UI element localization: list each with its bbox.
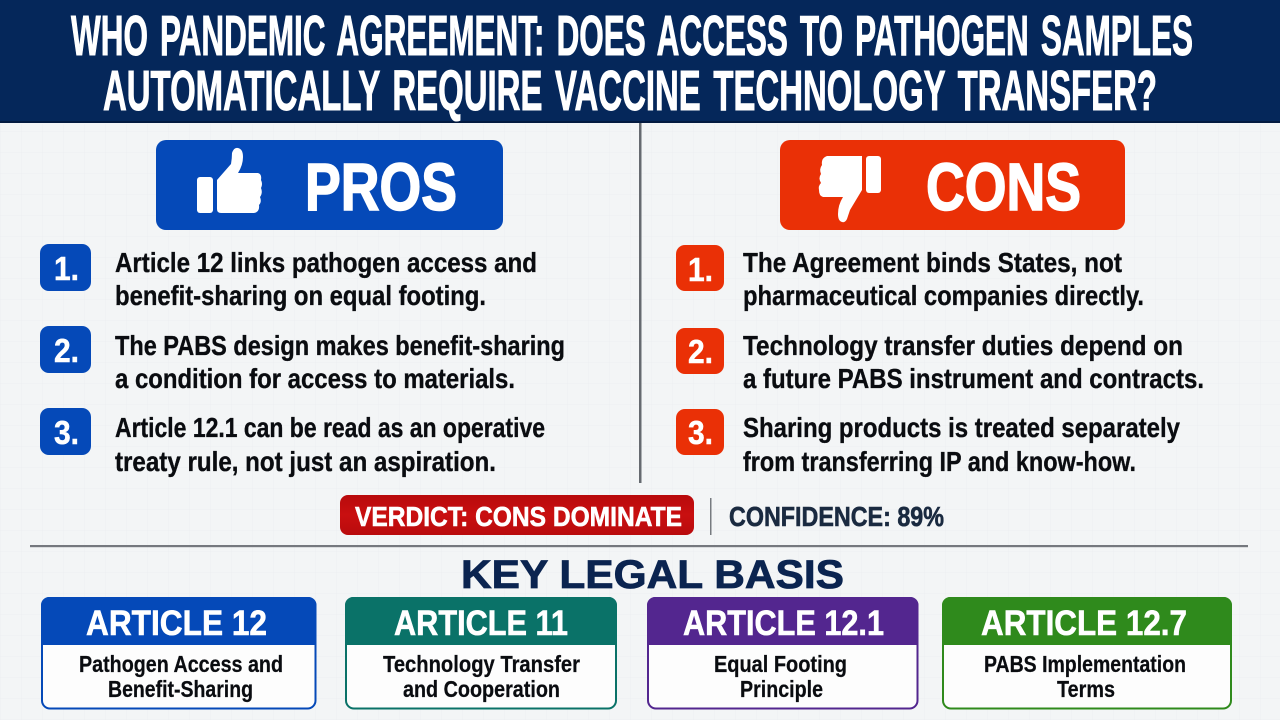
panel: cons [676,140,1204,477]
card: article 11 [345,597,617,708]
pros item 2: The PABS design makes benefit-sharing [115,330,565,361]
card: article 12.7 [942,597,1232,708]
card: article 12.1 [647,597,918,708]
cons item 1 [676,245,1144,311]
card: article 12.1: Principle [740,676,823,702]
section heading: key legal basis: KEY LEGAL BASIS [461,553,844,597]
pros heading badge [156,140,503,230]
cons item 1: pharmaceutical companies directly. [743,280,1144,311]
card: article 12.7: ARTICLE 12.7 [981,604,1187,643]
pros item 1: benefit-sharing on equal footing. [115,280,486,311]
card: article 12.7: PABS Implementation [984,651,1186,677]
cons item 1: 1. [688,251,713,288]
card: article 12.1: ARTICLE 12.1 [683,604,884,643]
card: article 11: Technology Transfer [383,651,580,677]
cons item 2 [676,328,1204,394]
pros item 3: treaty rule, not just an aspiration. [115,446,496,477]
cons item 2: 2. [688,333,713,370]
card: article 11: and Cooperation [403,676,560,702]
cons heading badge [780,140,1125,230]
pros item 2 [40,326,565,394]
pros item 2: 2. [54,332,79,369]
pros item 1 [40,244,537,311]
verdict bar [340,495,944,535]
header banner with title [0,0,1280,123]
confidence score: CONFIDENCE: 89% [729,501,944,532]
verdict pill [340,495,694,535]
pros item 2: a condition for access to materials. [115,363,515,394]
panel: pros [40,140,565,477]
card: article 12: Pathogen Access and [79,651,283,677]
card: article 12: Benefit-Sharing [108,676,253,702]
card: article 11: ARTICLE 11 [394,604,568,643]
cons item 3: from transferring IP and know-how. [743,446,1136,477]
cons item 3 [676,409,1181,477]
pros item 1: Article 12 links pathogen access and [115,247,537,278]
column divider [639,123,642,483]
cons heading badge: CONS [926,150,1081,225]
card: article 12: ARTICLE 12 [86,604,267,643]
title [71,4,1193,123]
cons item 2: Technology transfer duties depend on [743,330,1183,361]
pros item 3 [40,408,545,477]
icon: thumbs up [197,148,262,213]
cons item 2: a future PABS instrument and contracts. [743,363,1204,394]
pros heading badge: PROS [305,150,457,225]
card: article 12.7: Terms [1057,676,1115,702]
pros item 3: 3. [54,414,79,451]
cons item 3: 3. [688,414,713,451]
pros item 1: 1. [54,250,79,287]
verdict pill: VERDICT: CONS DOMINATE [355,501,682,532]
icon: thumbs down [819,156,881,222]
pros item 3: Article 12.1 can be read as an operative [115,412,545,443]
card: article 12 [41,597,316,708]
cons item 3: Sharing products is treated separately [743,412,1181,443]
cons item 1: The Agreement binds States, not [743,247,1122,278]
card: article 12.1: Equal Footing [714,651,847,677]
